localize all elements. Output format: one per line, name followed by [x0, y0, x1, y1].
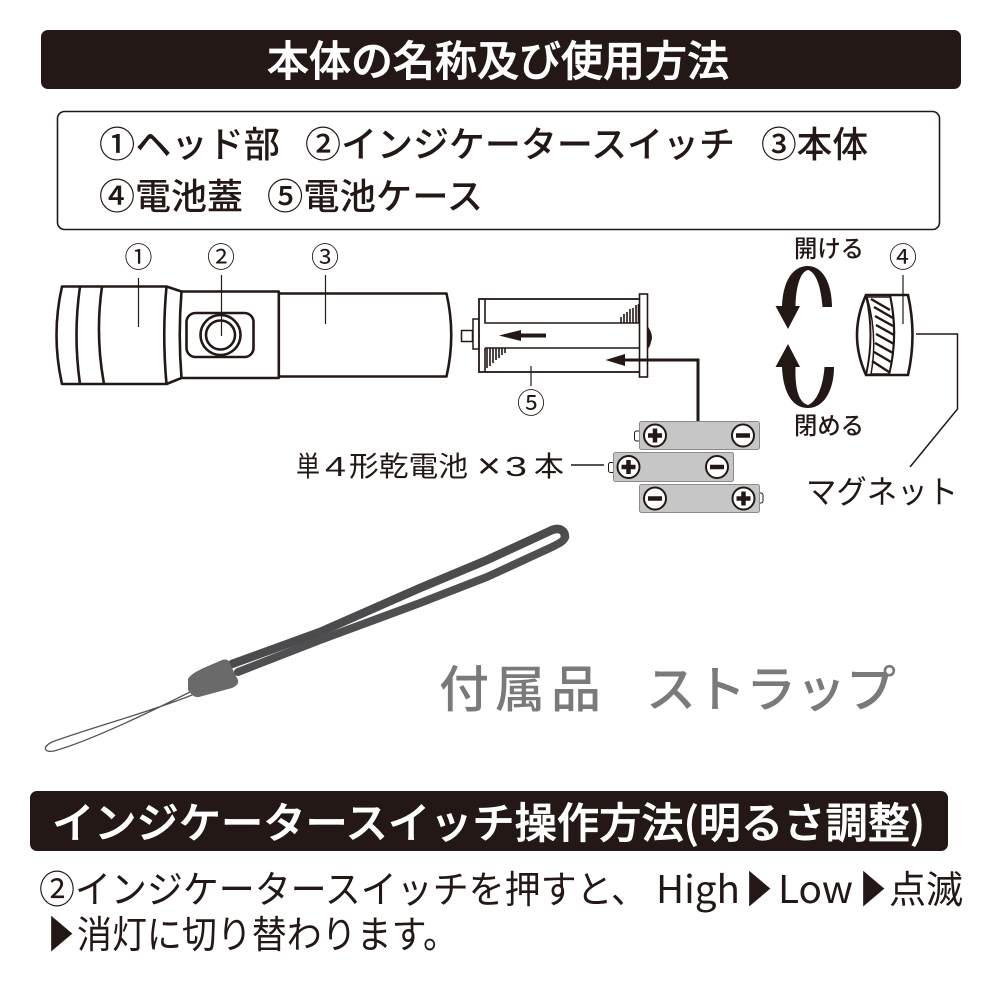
- panel: part names: ④電池蓋: [99, 176, 243, 217]
- arrow: close rotation: [776, 344, 834, 408]
- heading: indicator switch banner: インジケータースイッチ操作方法(明るさ調整): [52, 790, 925, 851]
- heading: top banner: [41, 30, 961, 89]
- battery 2: [608, 452, 734, 482]
- label: number 5: ⑤: [517, 388, 545, 419]
- arrow: battery insertion: [606, 354, 698, 428]
- text block: switch instructions: ▶: [746, 859, 772, 914]
- text block: switch instructions: ▶: [860, 859, 886, 914]
- label: AAA batteries: 4: [325, 451, 346, 482]
- label: open: 開ける: [794, 236, 864, 263]
- panel: part names: ①ヘッド部: [99, 124, 280, 165]
- arrow: open rotation: [776, 266, 832, 329]
- leader: magnet: [910, 334, 958, 467]
- diagram: flashlight body: [56, 242, 451, 384]
- diagram: battery case: [462, 294, 698, 428]
- panel: part names: ⑤電池ケース: [267, 176, 483, 217]
- text block: switch instructions: High: [656, 859, 740, 914]
- label: number 4: [889, 242, 917, 324]
- text block: switch instructions: ▶: [48, 904, 74, 959]
- diagram: batteries: [608, 422, 763, 512]
- panel: part names: ②インジケータースイッチ: [305, 124, 735, 165]
- panel: part names: ③本体: [761, 124, 868, 165]
- label: number 2: [207, 242, 235, 336]
- label: close: 閉める: [794, 413, 864, 440]
- label: number 4: ④: [889, 242, 917, 273]
- label: magnet: マグネット: [806, 474, 958, 510]
- label: number 2: ②: [207, 242, 235, 273]
- label: number 3: ③: [311, 242, 339, 273]
- label: number 1: [124, 242, 153, 327]
- illustration: wrist strap: [45, 529, 565, 751]
- heading: top banner: 本体の名称及び使用方法: [267, 38, 729, 85]
- text block: switch instructions: ②インジケータースイッチを押すと、: [39, 870, 647, 912]
- label: included strap: 付属品: [439, 662, 601, 718]
- label: AAA batteries: 3: [505, 451, 527, 482]
- label: AAA batteries: 本: [534, 451, 564, 482]
- text block: switch instructions: Low: [778, 859, 853, 914]
- label: AAA batteries: 形乾電池: [349, 451, 468, 482]
- diagram: battery cover: [857, 242, 958, 467]
- label: number 5: [517, 366, 545, 419]
- text block: switch instructions: 消灯に切り替わります。: [77, 915, 458, 957]
- battery 3: [640, 484, 763, 512]
- strap clasp: [188, 659, 238, 697]
- label: included strap: ストラップ: [646, 662, 896, 718]
- panel: part names: [58, 112, 940, 230]
- label: number 1: ①: [124, 242, 153, 273]
- arrow: insert into upper chamber: [499, 330, 546, 341]
- text block: switch instructions: [39, 859, 963, 959]
- label: number 3: [311, 242, 339, 324]
- label: included strap: [439, 662, 896, 718]
- label: AAA batteries: [296, 445, 604, 486]
- text block: switch instructions: 点滅: [889, 870, 963, 912]
- battery 1: [634, 422, 760, 450]
- label: AAA batteries: 単: [296, 451, 320, 482]
- label: AAA batteries: ×: [477, 445, 501, 486]
